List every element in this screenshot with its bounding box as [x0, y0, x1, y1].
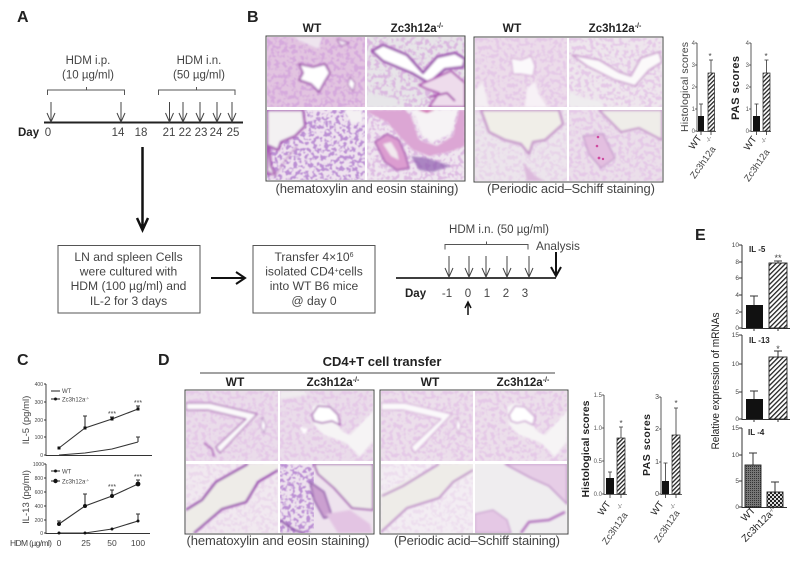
column headings: -/-: [437, 23, 444, 30]
significance star: *: [619, 419, 623, 428]
knockout bar: [672, 435, 680, 494]
tick labels: 0: [655, 491, 659, 498]
day labels: Day: [18, 127, 40, 139]
axes and error bars: [739, 335, 790, 422]
significance stars upper: ***: [134, 474, 142, 481]
box: LN and spleen cell culture: IL-2 for 3 days: [90, 294, 167, 308]
tick labels: 0: [746, 129, 750, 135]
label: analysis: Analysis: [536, 239, 580, 253]
x labels: WT: [739, 505, 758, 524]
tick labels: 0: [735, 504, 739, 511]
title: IL -4: [748, 428, 765, 437]
WT bar: [753, 116, 760, 131]
legend: -/-: [85, 478, 90, 482]
legend: WT: [62, 389, 72, 395]
D H&E knockout low magnification: [280, 391, 373, 461]
dose arrows: [47, 102, 236, 122]
tick labels: 1000: [33, 462, 44, 468]
column headings: -/-: [353, 377, 360, 384]
shared y axis title: Relative expression of mRNAs: [710, 312, 722, 450]
x axis labels: 100: [131, 538, 145, 548]
x axis labels: 0: [57, 538, 62, 548]
tick labels: 15: [732, 332, 739, 339]
box: CD4 cell transfer: isolated CD4: [265, 264, 335, 278]
label: HDM i.n. dose: (50 µg/ml): [173, 70, 225, 82]
day labels: 22: [179, 127, 191, 139]
tick labels: 10: [732, 242, 739, 249]
D H&E WT low magnification: [186, 391, 278, 461]
tick labels: 4: [735, 292, 739, 299]
tick labels: 6: [735, 275, 739, 282]
box: LN and spleen cell culture: were cultured with: [79, 264, 177, 278]
x labels: [596, 499, 631, 547]
tick labels: 2: [746, 85, 750, 91]
day labels: 18: [135, 127, 147, 139]
panel C: cytokine line charts: [10, 352, 152, 548]
tick labels: 0.5: [594, 459, 603, 465]
legend: [51, 470, 90, 486]
y axis title: IL-5 (pg/ml): [21, 396, 32, 444]
tick labels: 3: [655, 394, 659, 401]
axes and error bars: [749, 43, 771, 135]
box: LN and spleen cell culture: LN and spleen Cells: [74, 250, 183, 264]
analysis arrow: [551, 252, 561, 276]
knockout bar: [769, 357, 787, 419]
day labels: Day: [405, 288, 427, 300]
tick labels: 8: [735, 259, 739, 266]
bar chart: B PAS scores: [730, 41, 773, 184]
knockout series: [57, 480, 140, 524]
D H&E frame: [185, 390, 374, 534]
x labels: -/-: [768, 506, 776, 514]
captions: (Periodic acid–Schiff staining): [394, 533, 560, 548]
PAS knockout goblet cell spots: [596, 136, 604, 160]
WT bar: [745, 465, 761, 507]
captions: (Periodic acid–Schiff staining): [487, 181, 655, 196]
box: LN and spleen cell culture: HDM (100 µg/ml) and: [71, 279, 186, 293]
x labels: Zc3h12a: [600, 510, 631, 547]
tick labels: 5: [735, 478, 739, 485]
tick labels: 100: [35, 435, 43, 441]
H&E knockout high magnification: [367, 110, 464, 180]
column headings: -/-: [543, 377, 550, 384]
day labels: 14: [112, 127, 125, 139]
day labels: 0: [45, 127, 51, 139]
x labels: Zc3h12a: [742, 147, 773, 184]
PAS frame: [474, 37, 663, 182]
panel letter E: E: [695, 227, 706, 244]
knockout bar: [767, 492, 783, 507]
legend: WT: [62, 470, 72, 476]
x axis labels: 50: [107, 538, 117, 548]
significance stars: ***: [108, 484, 116, 491]
tick labels: 2: [655, 426, 659, 433]
column headings: Zc3h12a: [307, 377, 353, 389]
tick labels: [732, 425, 739, 511]
WT markers: [58, 520, 140, 534]
PAS knockout low magnification: [569, 38, 662, 107]
D H&E knockout high magnification: [280, 464, 373, 533]
title: IL -5: [749, 245, 766, 254]
tick labels: [655, 394, 659, 498]
y axis title: Histological scores: [679, 42, 691, 132]
day labels: 1: [484, 288, 490, 300]
column headings: Zc3h12a: [589, 23, 635, 35]
tick labels: 3: [746, 63, 750, 69]
tick labels: 4: [746, 41, 750, 47]
H&E WT high magnification: [267, 110, 365, 180]
dose arrows: [445, 256, 533, 277]
x labels: -/-: [616, 503, 625, 511]
bar chart: D histological scores: [580, 393, 631, 547]
significance star: *: [776, 344, 780, 354]
WT bar: [606, 478, 614, 494]
tick labels: 400: [35, 382, 43, 388]
day labels: 2: [503, 288, 509, 300]
line chart: IL-13: [21, 462, 150, 537]
day labels: 0: [465, 288, 471, 300]
day labels: 24: [210, 127, 223, 139]
day axis line: [44, 122, 243, 124]
PAS WT high magnification: [475, 110, 567, 181]
panel letter C: C: [17, 352, 29, 369]
axis line: [396, 277, 556, 279]
box: CD4 cell transfer: 6: [350, 252, 354, 259]
tick labels: 4: [692, 41, 696, 47]
axes and error bars: [695, 43, 716, 135]
day labels: [405, 288, 528, 300]
knockout bar: [763, 73, 770, 131]
captions: (hematoxylin and eosin staining): [276, 181, 458, 196]
x labels: -/-: [760, 137, 769, 145]
tick labels: 15: [732, 425, 739, 432]
transfer arrow: [465, 302, 471, 315]
x labels: -/-: [705, 136, 714, 144]
tick labels: 0: [692, 129, 696, 135]
box: CD4 cell transfer: @ day 0: [291, 294, 337, 308]
tick labels: 0.0: [594, 492, 603, 498]
tick labels: [35, 382, 43, 459]
braces over dosing periods: [48, 87, 235, 95]
panel E: relative mRNA expression: [695, 227, 790, 545]
tick labels: 0: [735, 416, 739, 423]
label: HDM i.n.: HDM i.n. (50 µg/ml): [449, 224, 549, 236]
micrograph: PAS panel: [474, 37, 663, 182]
tick labels: 2: [692, 85, 696, 91]
column headings: [226, 375, 550, 389]
legend: Zc3h12a: [62, 480, 85, 486]
column headings: -/-: [635, 23, 642, 30]
column headings: Zc3h12a: [391, 23, 437, 35]
WT bar: [746, 305, 763, 328]
column headings: WT: [503, 21, 522, 35]
knockout bar: [617, 438, 625, 494]
D PAS frame: [380, 390, 568, 534]
micrograph: D PAS panel: [380, 390, 568, 534]
legend: Zc3h12a: [62, 398, 85, 404]
H&E WT low magnification: [267, 37, 365, 107]
tick labels: [33, 462, 44, 537]
tick labels: 1.5: [594, 393, 603, 399]
PAS knockout high magnification: [569, 110, 662, 181]
bar chart: D PAS scores: [641, 394, 683, 545]
tick labels: 3: [692, 63, 696, 69]
brace: [445, 242, 528, 250]
y axis title: IL-13 (pg/ml): [21, 470, 32, 524]
day labels: -1: [442, 288, 452, 300]
timeline: transfer protocol: [396, 224, 580, 315]
tick labels: 200: [35, 418, 43, 424]
box: LN and spleen cell culture: [58, 246, 200, 313]
knockout markers: [58, 408, 140, 450]
bar chart: B histological scores: [679, 41, 719, 181]
x axis labels: [10, 538, 145, 548]
panel D: CD4+ T cell transfer histology: [158, 352, 568, 548]
WT series: [59, 437, 140, 455]
significance star: *: [764, 52, 768, 61]
significance stars: **: [774, 253, 782, 263]
bar chart: IL-4: [732, 425, 787, 545]
panel B: histology micrographs: [247, 9, 663, 196]
day labels: 3: [522, 288, 528, 300]
x labels: WT: [742, 134, 760, 153]
column headings: Zc3h12a: [497, 377, 543, 389]
tick labels: 0: [40, 531, 43, 537]
panel letter D: D: [158, 352, 170, 369]
tick labels: 1.0: [594, 426, 603, 432]
PAS WT low magnification: [475, 38, 567, 107]
day labels: [18, 127, 239, 139]
legend: [51, 389, 90, 404]
captions: [186, 533, 560, 548]
WT bar: [662, 481, 669, 494]
tick labels: 0: [40, 453, 43, 459]
line chart: IL-5: [21, 382, 152, 459]
x axis labels: HDM (µg/ml): [10, 538, 52, 548]
bar chart: IL-13: [732, 332, 790, 423]
y axis title: PAS scores: [641, 414, 653, 476]
H&E frame: [266, 36, 465, 181]
title: IL -13: [749, 336, 770, 345]
axes and error bars: [659, 397, 682, 498]
day labels: 23: [195, 127, 207, 139]
panel letter B: B: [247, 9, 259, 26]
tick labels: [732, 242, 739, 332]
bar chart: IL-5: [732, 242, 790, 332]
axes: [44, 464, 150, 534]
tick labels: 2: [735, 309, 739, 316]
tick labels: 200: [35, 518, 43, 524]
micrograph: D H&E panel: [185, 390, 374, 534]
box: CD4 cell transfer: +: [334, 268, 339, 274]
tick labels: [594, 393, 603, 498]
tick labels: 300: [35, 400, 43, 406]
column headings: WT: [226, 375, 245, 389]
axes and error bars: [739, 245, 790, 331]
knockout bar: [708, 73, 714, 131]
captions: (hematoxylin and eosin staining): [186, 533, 370, 548]
box: CD4 cell transfer: cells: [339, 264, 363, 278]
WT series: [59, 514, 140, 533]
x labels: Zc3h12a: [652, 508, 683, 545]
significance star: *: [708, 52, 712, 61]
knockout bar: [769, 263, 787, 328]
tick labels: 600: [35, 490, 43, 496]
tick labels: 10: [732, 452, 739, 459]
D PAS knockout high magnification: [475, 464, 567, 533]
box: CD4 cell transfer: into WT B6 mice: [270, 279, 359, 293]
micrograph: H&E panel: [266, 36, 465, 181]
WT bar: [698, 116, 704, 131]
y axis title: PAS scores: [730, 56, 742, 120]
arrow: culture to transfer: [211, 272, 245, 284]
tick labels: 800: [35, 476, 43, 482]
x axis labels: 25: [81, 538, 91, 548]
x labels: Zc3h12a: [740, 509, 775, 545]
box: CD4 cell transfer: Transfer 4×10: [274, 250, 350, 264]
tick labels: 5: [735, 389, 739, 396]
x labels: WT: [687, 133, 705, 152]
tick labels: 1: [655, 459, 659, 466]
WT bar: [746, 399, 763, 419]
H&E knockout low magnification: [367, 37, 464, 107]
y axis title: Histological scores: [580, 400, 592, 498]
x labels: -/-: [669, 503, 678, 511]
D PAS WT high magnification: [381, 464, 473, 533]
label: HDM i.n. dose: HDM i.n.: [177, 55, 221, 67]
arrow: from timeline down to culture box: [137, 147, 148, 230]
axes and error bars: [739, 428, 787, 508]
D PAS knockout low magnification: [475, 391, 567, 461]
significance star: *: [674, 399, 678, 408]
box: CD4 cell transfer: [253, 246, 375, 313]
x labels: Zc3h12a: [688, 144, 719, 181]
tick labels: 10: [732, 361, 739, 368]
tick labels: [746, 41, 750, 135]
legend: -/-: [85, 396, 90, 400]
label: HDM i.p. dose: (10 µg/ml): [62, 70, 114, 82]
tick labels: 0: [735, 325, 739, 332]
knockout series: [59, 406, 140, 448]
heading rule: [200, 372, 555, 374]
panel A: immunisation timeline: [17, 9, 243, 139]
column headings: WT: [303, 21, 322, 35]
tick labels: 400: [35, 504, 43, 510]
tick labels: 1: [746, 107, 750, 113]
captions: [276, 181, 655, 196]
significance stars: ***: [108, 411, 116, 418]
tick labels: 1: [692, 107, 696, 113]
day labels: 25: [227, 127, 239, 139]
axes: [44, 384, 152, 456]
knockout markers: [57, 482, 140, 526]
x labels: WT: [596, 499, 614, 518]
label: HDM i.p. dose: HDM i.p.: [66, 55, 110, 67]
tick labels: [692, 41, 696, 135]
column headings: WT: [421, 375, 440, 389]
D H&E WT high magnification: [186, 464, 278, 533]
day labels: 21: [163, 127, 175, 139]
D PAS WT low magnification: [381, 391, 473, 461]
axes and error bars: [602, 395, 627, 498]
tick labels: [732, 332, 739, 423]
panel letter A: A: [17, 9, 29, 26]
column headings: [303, 21, 642, 35]
significance stars upper: ***: [134, 400, 142, 407]
x labels: WT: [649, 499, 667, 518]
heading: CD4+T cell transfer: [323, 354, 441, 369]
